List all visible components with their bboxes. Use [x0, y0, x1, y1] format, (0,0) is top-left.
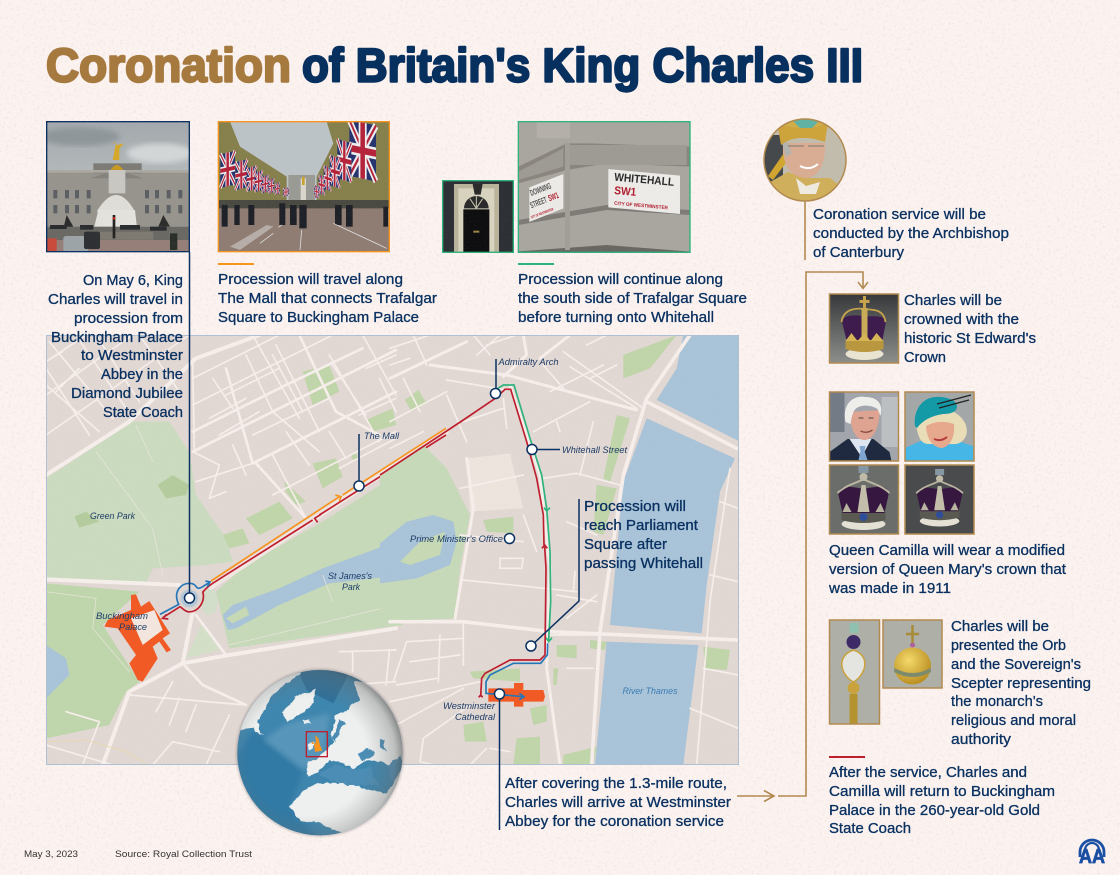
text: return journey caption: Palace in the 260-year-old Gold — [829, 803, 1040, 819]
text: opening procession caption: Abbey in the — [101, 367, 183, 383]
text: arrival caption: Charles will arrive at Westminster — [505, 795, 731, 811]
photo: Whitehall street signs: CITY OF WESTMINSTER — [530, 207, 554, 220]
map — [46, 335, 740, 765]
map border — [46, 336, 738, 764]
text: Parliament Square caption: Square after — [584, 537, 667, 553]
title: Coronation — [46, 40, 291, 92]
text: The Mall caption: Procession will travel along — [218, 272, 403, 288]
text: Archbishop caption: Coronation service will be — [813, 207, 986, 223]
callout: leader lines and location markers — [184, 252, 579, 830]
photo: Whitehall street signs: WHITEHALL — [614, 172, 675, 189]
photo: Sovereign's Orb — [883, 620, 942, 688]
map: St James's Park east — [380, 445, 470, 622]
map: Westminster Abbey footprint — [488, 683, 545, 707]
text: Archbishop caption: of Canterbury — [813, 245, 905, 261]
text: opening procession caption: State Coach — [103, 405, 183, 421]
map labels: Westminster — [443, 701, 496, 711]
text: Queen Camilla caption — [828, 543, 1066, 597]
globe — [230, 667, 410, 840]
text: Orb and Sceptre caption — [951, 619, 1091, 748]
photo: Whitehall street signs — [518, 122, 690, 255]
text: Whitehall caption: the south side of Trafalgar Square — [518, 291, 747, 307]
photo: Whitehall street signs: SW1 — [614, 185, 637, 199]
text: date: May 3, 2023 — [24, 849, 78, 860]
map labels: Admiralty Arch — [497, 357, 558, 367]
photo: Sovereign's Sceptre — [830, 620, 880, 724]
text: opening procession caption: procession from — [74, 311, 183, 327]
text: opening procession caption: Diamond Jubilee — [71, 386, 183, 402]
text: return journey caption: State Coach — [829, 821, 911, 837]
text: Orb and Sceptre caption: Scepter representing — [951, 676, 1091, 692]
text: Parliament Square caption: passing Whitehall — [584, 556, 703, 572]
text: opening procession caption — [48, 273, 183, 421]
route: arrival blue — [486, 643, 548, 700]
icon: UK highlighted — [306, 732, 327, 757]
text: return journey caption: After the service, Charles and — [829, 765, 1027, 781]
text: arrival caption: After covering the 1.3-mile route, — [505, 776, 727, 792]
text: return journey caption — [829, 756, 1055, 837]
photo: Queen Mary's Crown — [905, 465, 974, 534]
map labels: The Mall — [364, 431, 400, 441]
route: departure blue — [160, 581, 210, 614]
route: Admiralty to Whitehall green — [495, 385, 552, 642]
text: Queen Camilla caption: version of Queen Mary's crown that — [829, 562, 1066, 578]
title — [46, 40, 863, 92]
photo: Whitehall street signs: CITY OF WESTMINSTER — [614, 201, 669, 211]
arrow: connector from arrival to service — [737, 201, 868, 802]
text: Orb and Sceptre caption: religious and moral — [951, 713, 1076, 729]
map labels: Buckingham — [96, 611, 149, 621]
map: parks east — [405, 335, 730, 765]
text: Orb and Sceptre caption: authority — [951, 732, 1012, 748]
globe: inland seas — [318, 718, 402, 792]
title: of Britain's King Charles III — [302, 40, 863, 92]
photo: Whitehall street signs: STREET — [528, 195, 549, 210]
text: Archbishop caption: conducted by the Archbishop — [813, 226, 1009, 242]
text: Orb and Sceptre caption: and the Sovereign's — [951, 657, 1081, 673]
route: return red east — [380, 389, 547, 697]
text: St Edward's Crown caption: Crown — [904, 350, 946, 366]
route: return red west — [163, 435, 446, 619]
map: parks west — [46, 365, 403, 738]
map labels: Whitehall Street — [562, 445, 628, 455]
text: opening procession caption: Buckingham Palace — [51, 330, 183, 346]
photo: Buckingham Palace — [40, 122, 193, 253]
map labels: Park — [342, 582, 360, 592]
text: The Mall caption: Square to Buckingham Palace — [218, 310, 419, 326]
text: opening procession caption: On May 6, King — [83, 273, 183, 289]
photo: Imperial State Crown — [830, 465, 898, 534]
text: Queen Camilla caption: was made in 1911 — [828, 581, 951, 597]
photo: Whitehall street signs: DOWNING — [528, 181, 553, 198]
route: The Mall orange — [211, 428, 446, 581]
text: Whitehall caption: Procession will continue along — [518, 272, 723, 288]
globe: land masses — [240, 672, 403, 832]
photo: 10 Downing Street door — [443, 181, 513, 252]
text: arrival caption: Abbey for the coronation service — [505, 814, 724, 830]
text: opening procession caption: Charles will travel in — [48, 292, 183, 308]
text: opening procession caption: to Westminster — [81, 348, 183, 364]
text: source: Source: Royal Collection Trust — [115, 849, 252, 860]
map labels: Prime Minister's Office — [410, 534, 503, 544]
text: Whitehall caption: before turning onto Whitehall — [518, 310, 714, 326]
text: Whitehall caption — [518, 263, 747, 326]
icon: Anadolu Agency logo: AA — [1079, 846, 1105, 868]
map labels: St James's — [328, 571, 372, 581]
text: arrival caption — [505, 776, 731, 830]
map: roads east — [390, 335, 738, 765]
text: return journey caption: Camilla will return to Buckingham — [829, 784, 1055, 800]
photo: King Charles portrait — [830, 392, 898, 461]
text: St Edward's Crown caption: crowned with the — [904, 312, 1019, 328]
photo: The Mall with flags — [218, 120, 389, 252]
text: The Mall caption — [218, 263, 437, 326]
text: Parliament Square caption: Procession will — [584, 499, 686, 515]
text: Orb and Sceptre caption: Charles will be — [951, 619, 1049, 635]
map labels: Green Park — [90, 511, 135, 521]
map labels: Cathedral — [455, 712, 496, 722]
map: Buckingham Palace footprint — [104, 594, 171, 682]
text: Orb and Sceptre caption: presented the Orb — [951, 638, 1066, 654]
photo: Whitehall street signs: SW1 — [546, 190, 560, 203]
text: Parliament Square caption: reach Parliament — [584, 518, 698, 534]
text: St Edward's Crown caption — [904, 293, 1036, 366]
photo: St Edward's Crown — [830, 294, 898, 363]
photo: Queen Camilla portrait — [905, 392, 974, 461]
text: Orb and Sceptre caption: the monarch's — [951, 694, 1043, 710]
map labels: River Thames — [622, 686, 678, 696]
map labels: Palace — [119, 622, 147, 632]
text: Parliament Square caption — [584, 499, 703, 572]
map: roads west — [46, 335, 446, 765]
photo: Archbishop of Canterbury — [763, 114, 848, 204]
text: Archbishop caption — [813, 207, 1009, 261]
text: Queen Camilla caption: Queen Camilla will wear a modified — [829, 543, 1065, 559]
text: St Edward's Crown caption: historic St Edward's — [904, 331, 1036, 347]
text: The Mall caption: The Mall that connects Trafalgar — [218, 291, 437, 307]
map: River Thames — [595, 335, 740, 765]
text: St Edward's Crown caption: Charles will be — [904, 293, 1002, 309]
map labels — [90, 357, 678, 722]
